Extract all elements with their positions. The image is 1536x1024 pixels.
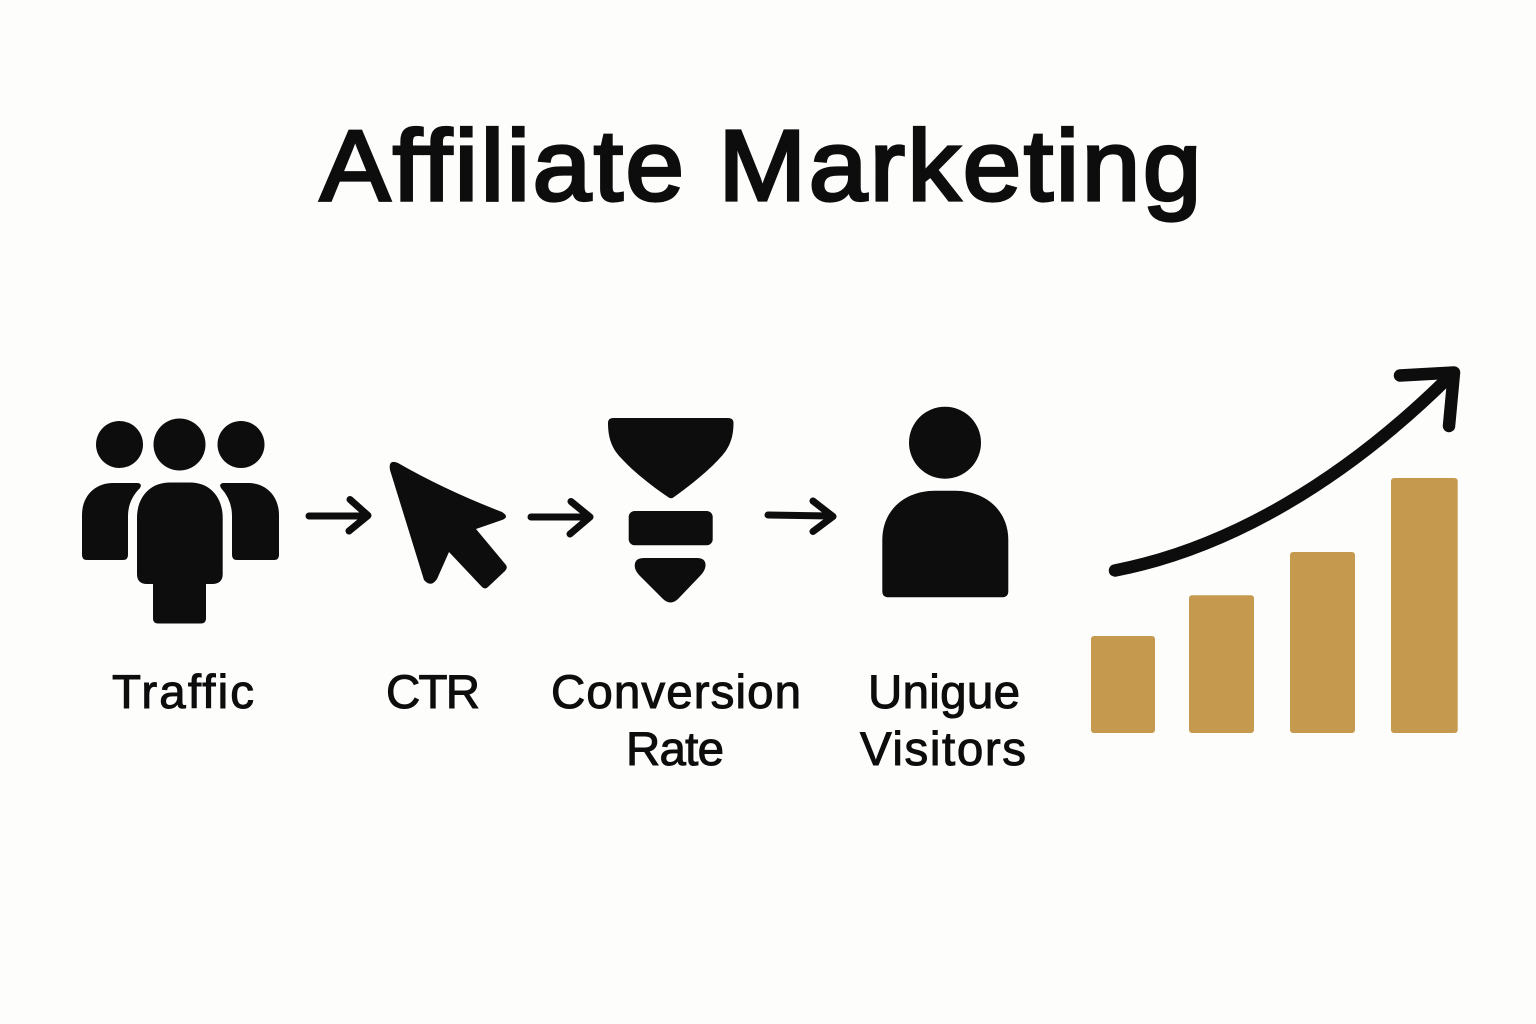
label: Unigue Visitors: Unigue [868,666,1020,719]
icon: unique visitor person [882,407,1008,597]
icon: cursor [390,462,507,588]
title: Affiliate Marketing [320,110,1204,222]
arrow: growth trend [1115,372,1454,570]
bar chart: growth [1091,478,1458,733]
arrow: conversion to visitors [768,501,833,532]
label: Unigue Visitors: Visitors [860,723,1026,776]
label: Conversion Rate: Rate [626,723,724,776]
label: CTR: CTR [386,666,480,719]
label: Conversion Rate [551,666,801,776]
icon: traffic group of people [82,418,279,624]
icon: conversion funnel [608,418,734,602]
label: Conversion Rate: Conversion [551,666,801,719]
label: Traffic: Traffic [112,666,254,719]
label: Unigue Visitors [860,666,1026,776]
arrow: traffic to CTR [309,500,368,531]
arrow: CTR to conversion [531,502,590,534]
